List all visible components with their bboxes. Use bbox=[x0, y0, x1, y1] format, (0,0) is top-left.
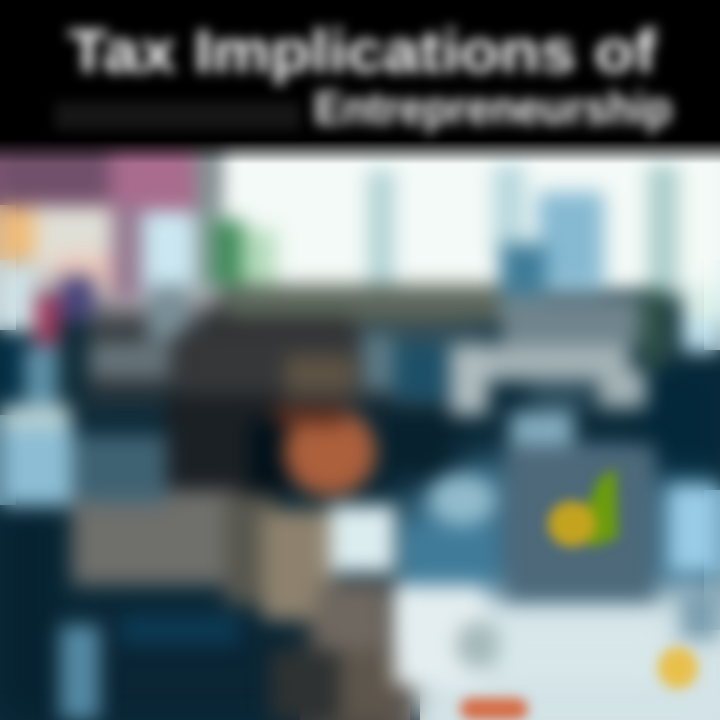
title: Tax Implications of bbox=[68, 18, 657, 85]
wall: magenta band bbox=[0, 130, 110, 202]
streak bbox=[60, 625, 100, 720]
wall edge and plant bbox=[198, 130, 218, 290]
chart: green and yellow wedge bbox=[548, 468, 618, 548]
small window bbox=[142, 212, 194, 297]
icon: orange object on desk bbox=[460, 698, 528, 720]
monitor top spot bbox=[510, 412, 574, 448]
monitor: light shape bbox=[450, 345, 630, 381]
window columns bbox=[368, 170, 394, 290]
person at left: purple and red blur bbox=[36, 296, 62, 348]
header: black title band bbox=[0, 0, 720, 164]
window: bright panes bbox=[225, 130, 720, 285]
hat bbox=[176, 330, 360, 402]
title bbox=[68, 18, 672, 134]
desk highlights bbox=[394, 585, 486, 685]
white shoulder highlight bbox=[330, 505, 396, 573]
poster: orange and pale panels bbox=[0, 208, 40, 260]
face bbox=[284, 408, 376, 496]
icon: yellow circle bbox=[658, 647, 698, 689]
sweater bbox=[72, 490, 237, 585]
soft lower edge of the band bbox=[0, 140, 720, 164]
decorative faint bar left of second title line bbox=[55, 102, 300, 130]
olive horizon band bbox=[225, 285, 500, 321]
left blue panel bbox=[0, 418, 72, 506]
blue building bbox=[538, 192, 604, 290]
hair bbox=[165, 395, 285, 503]
blue patches bbox=[428, 474, 496, 526]
title: Entrepreneurship bbox=[314, 82, 672, 134]
solid band bbox=[0, 0, 720, 140]
